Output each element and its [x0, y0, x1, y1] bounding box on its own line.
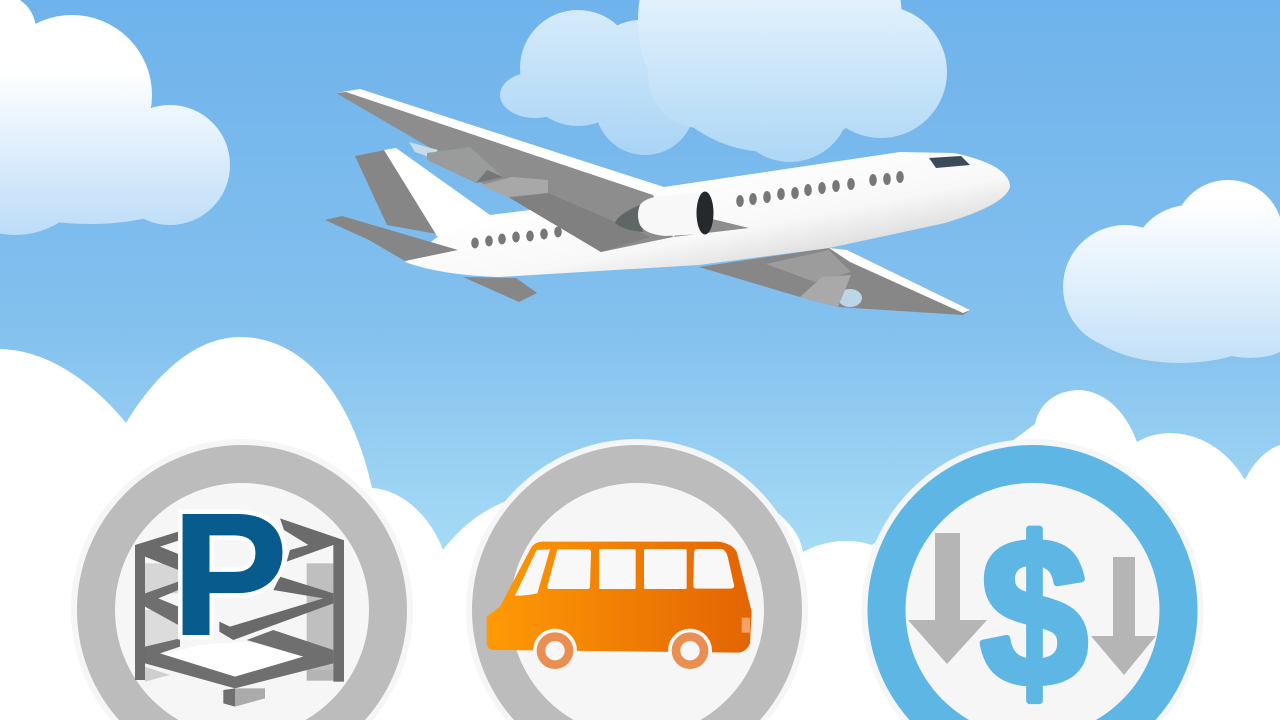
cloud: top center rear — [500, 10, 695, 155]
badge ring — [71, 439, 413, 720]
bottom white cloud bank — [0, 337, 1280, 720]
icon: letter P: P — [172, 477, 287, 671]
cloud: top left — [0, 0, 230, 235]
rear windows — [471, 226, 562, 248]
bus wheels — [533, 629, 712, 673]
badge: parking — [71, 439, 413, 720]
engine — [615, 192, 749, 237]
icon: bus — [487, 542, 752, 673]
horizontal stabilizer — [325, 216, 458, 261]
lower stabilizer — [463, 277, 537, 302]
airplane — [325, 89, 1010, 315]
tail fin — [355, 148, 540, 260]
icon: parking garage — [135, 518, 344, 707]
cockpit window — [929, 156, 970, 168]
badge: shuttle bus — [466, 439, 808, 720]
bus windows — [515, 549, 734, 596]
badge: lower cost — [862, 439, 1204, 720]
near wing — [699, 248, 970, 315]
fuselage — [405, 152, 1010, 277]
badge ring — [862, 439, 1204, 720]
front windows — [736, 171, 904, 207]
far wing — [336, 89, 673, 252]
cloud: top center front — [638, 0, 947, 162]
cloud: right — [1063, 180, 1280, 363]
badge ring — [466, 439, 808, 720]
icon: left down arrow — [908, 533, 987, 664]
icon: letter P: P — [172, 477, 287, 671]
icon: right down arrow — [1091, 557, 1156, 675]
